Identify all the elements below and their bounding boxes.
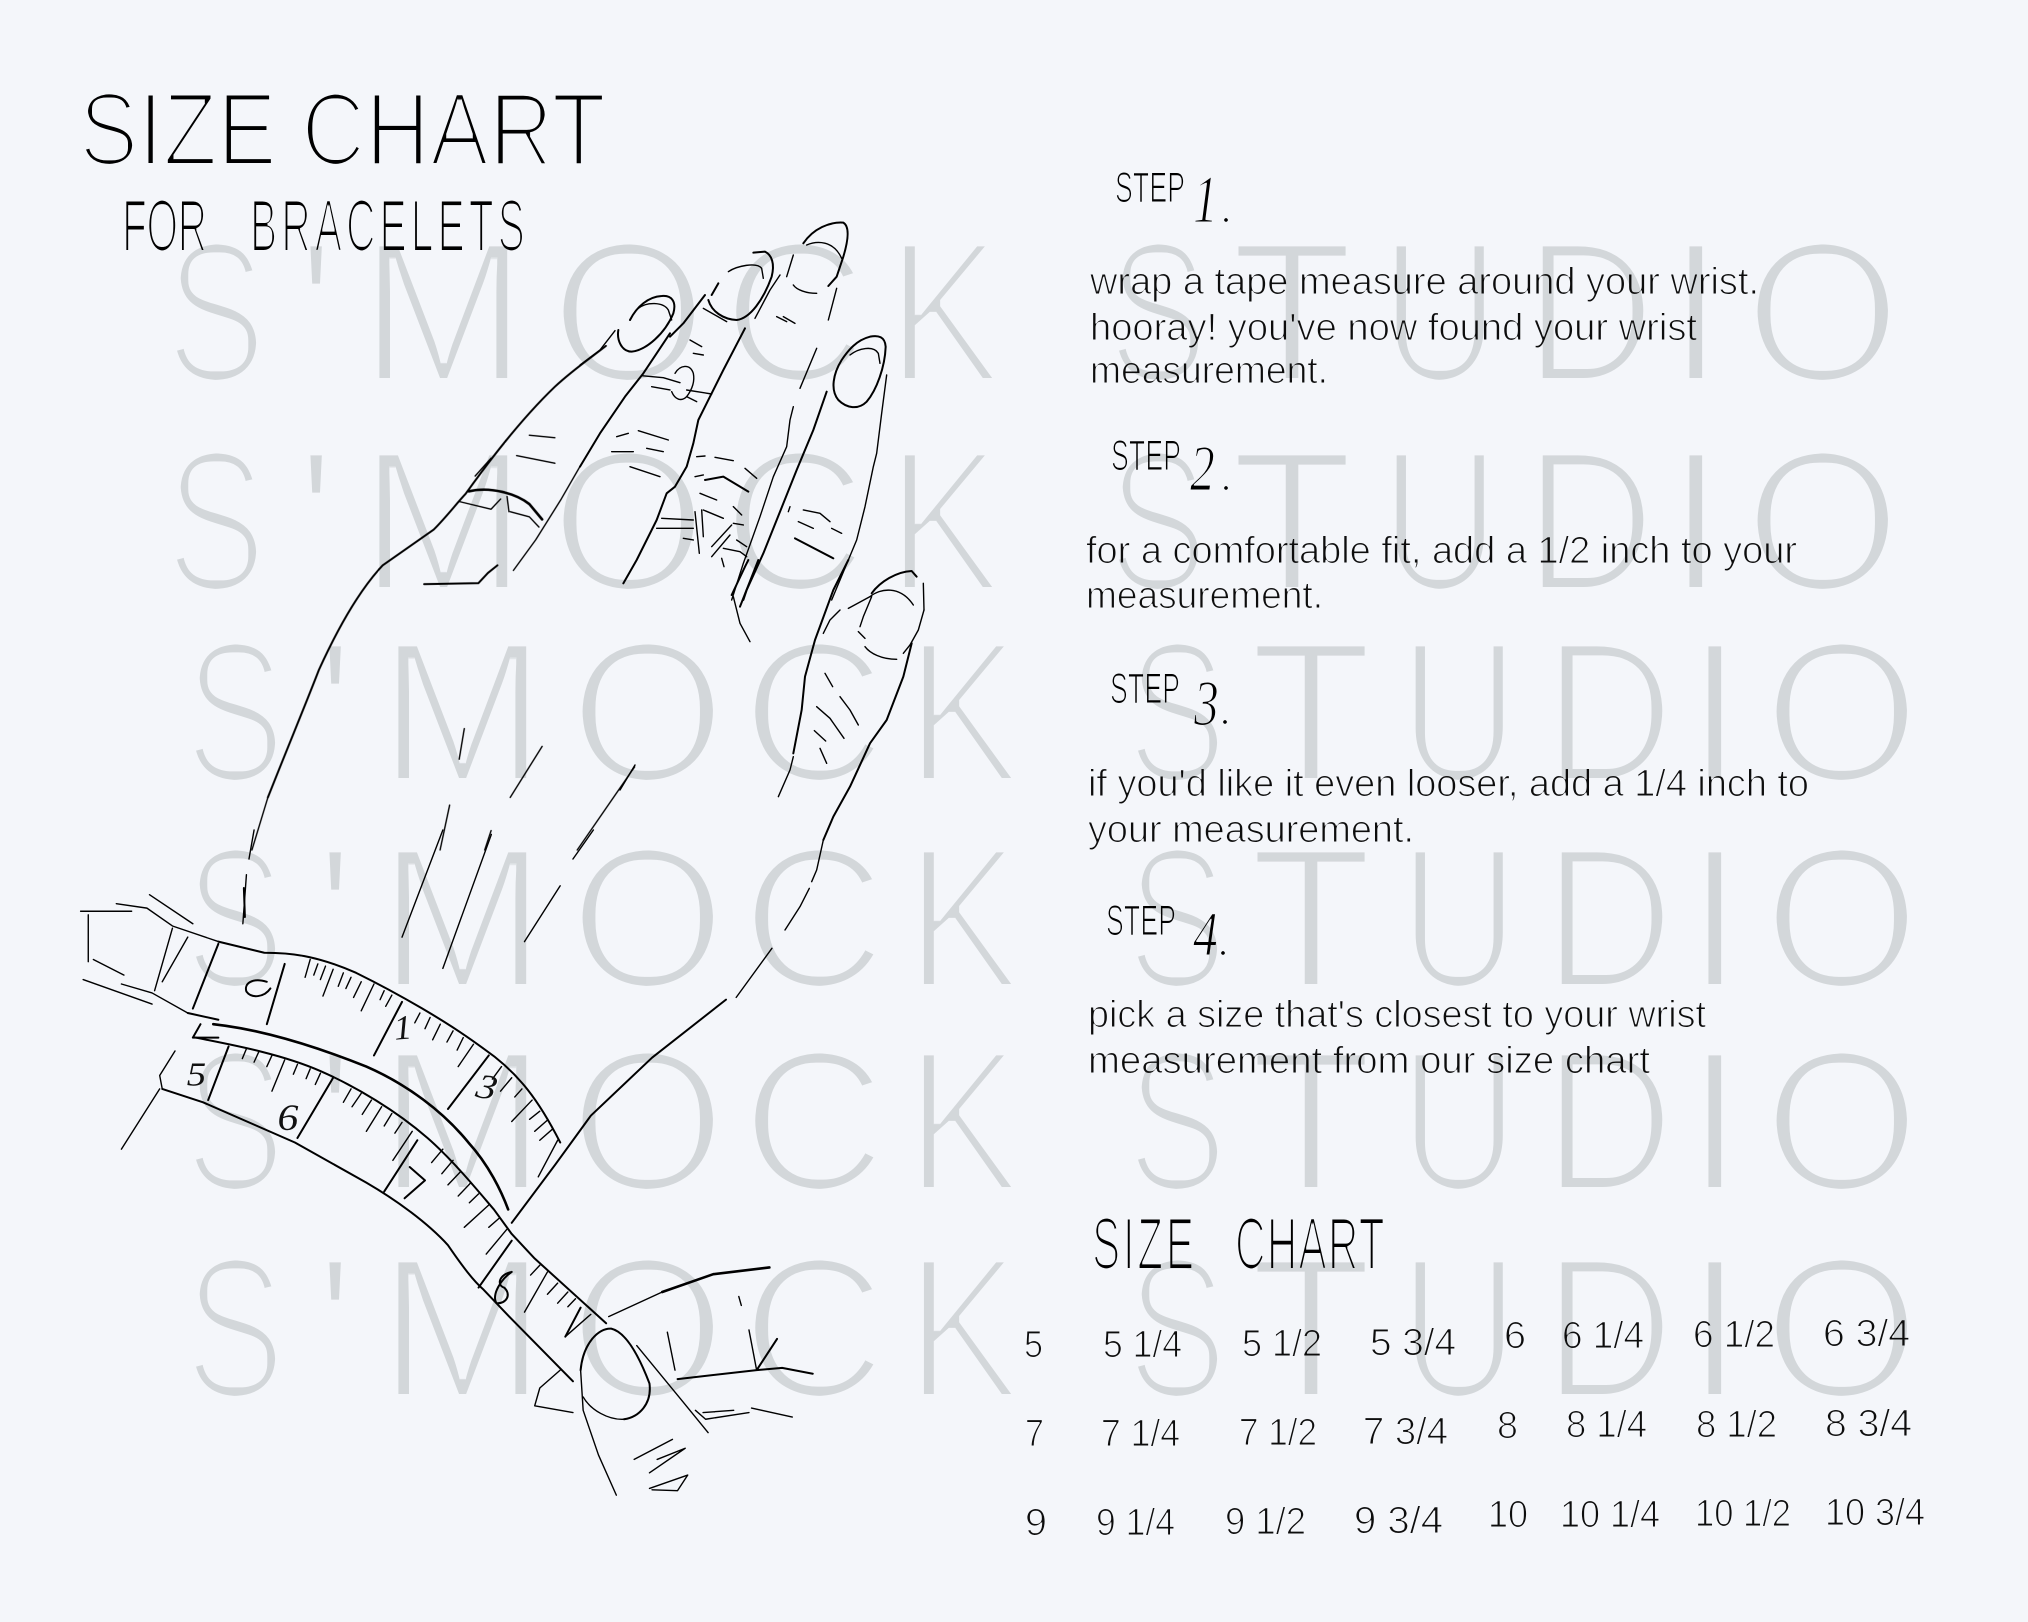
row: sizes 7 to 8 3/4: 8 1/4 bbox=[1566, 1404, 1647, 1446]
row: sizes 7 to 8 3/4: 8 1/2 bbox=[1696, 1404, 1777, 1446]
step 1 text bbox=[1089, 261, 1759, 392]
row: sizes 7 to 8 3/4: 7 bbox=[1025, 1413, 1044, 1455]
row: sizes 9 to 10 3/4: 9 1/4 bbox=[1096, 1502, 1175, 1544]
watermark: repeated S'MOCK STUDIO rows: S bbox=[1127, 1217, 1227, 1440]
watermark: repeated S'MOCK STUDIO rows: S bbox=[185, 1010, 285, 1233]
step 4 text: pick a size that's closest to your wrist bbox=[1088, 994, 1706, 1036]
watermark: repeated S'MOCK STUDIO rows: D bbox=[1525, 410, 1655, 633]
step 1 text: wrap a tape measure around your wrist. bbox=[1089, 261, 1759, 303]
tape numerals: 1 bbox=[392, 1008, 413, 1048]
watermark: repeated S'MOCK STUDIO rows: D bbox=[1544, 1010, 1674, 1233]
watermark: repeated S'MOCK STUDIO rows: K bbox=[907, 807, 1020, 1030]
watermark: repeated S'MOCK STUDIO rows: 'MOC bbox=[316, 807, 886, 1030]
watermark: repeated S'MOCK STUDIO rows: S bbox=[185, 601, 285, 824]
row: sizes 5 to 6 3/4 bbox=[1024, 1313, 1910, 1366]
watermark: repeated S'MOCK STUDIO rows: U bbox=[1400, 599, 1518, 824]
subheading: BRACELETS bbox=[250, 184, 525, 267]
step 3 text: your measurement. bbox=[1088, 809, 1414, 851]
watermark: repeated S'MOCK STUDIO rows: 'MOC bbox=[297, 201, 867, 424]
watermark: repeated S'MOCK STUDIO rows: IO bbox=[1687, 601, 1920, 824]
watermark: repeated S'MOCK STUDIO rows: T bbox=[1250, 1010, 1372, 1233]
size chart heading bbox=[1092, 1203, 1385, 1285]
row: sizes 5 to 6 3/4: 5 3/4 bbox=[1370, 1322, 1456, 1364]
step 3 bbox=[1088, 665, 1809, 851]
back of hand and pinky base bbox=[252, 346, 635, 850]
step 1 heading: STEP bbox=[1115, 164, 1185, 212]
step 1 text: hooray! you've now found your wrist bbox=[1090, 307, 1697, 349]
step 3 heading: 3 bbox=[1193, 667, 1219, 740]
row: sizes 7 to 8 3/4: 8 3/4 bbox=[1825, 1403, 1912, 1445]
watermark: repeated S'MOCK STUDIO rows: T bbox=[1250, 807, 1372, 1030]
watermark: repeated S'MOCK STUDIO rows bbox=[166, 199, 1920, 1440]
tape numerals bbox=[187, 980, 512, 1303]
watermark: repeated S'MOCK STUDIO rows: D bbox=[1544, 807, 1674, 1030]
watermark: repeated S'MOCK STUDIO rows: IO bbox=[1668, 201, 1901, 424]
subheading: FOR bbox=[122, 184, 207, 267]
row: sizes 9 to 10 3/4: 10 1/4 bbox=[1560, 1494, 1660, 1536]
watermark: repeated S'MOCK STUDIO rows: IO bbox=[1687, 1010, 1920, 1233]
row: sizes 9 to 10 3/4 bbox=[1025, 1492, 1925, 1544]
row: sizes 5 to 6 3/4: 6 1/4 bbox=[1562, 1315, 1644, 1357]
watermark: repeated S'MOCK STUDIO rows: U bbox=[1400, 1215, 1518, 1440]
title bbox=[79, 72, 606, 267]
watermark: repeated S'MOCK STUDIO rows: D bbox=[1525, 201, 1655, 424]
watermark: repeated S'MOCK STUDIO rows: S bbox=[1108, 410, 1208, 633]
tape numerals: 5 bbox=[187, 1056, 206, 1093]
watermark: repeated S'MOCK STUDIO rows: U bbox=[1400, 805, 1518, 1030]
step 4 heading: STEP bbox=[1106, 897, 1176, 945]
step 4 heading bbox=[1106, 897, 1226, 969]
watermark: repeated S'MOCK STUDIO rows: S bbox=[1127, 601, 1227, 824]
watermark: repeated S'MOCK STUDIO rows: 'MOC bbox=[316, 601, 886, 824]
watermark: repeated S'MOCK STUDIO rows: K bbox=[888, 201, 1001, 424]
illustration: hand with measuring tape bbox=[81, 223, 924, 1495]
row: sizes 7 to 8 3/4: 7 3/4 bbox=[1363, 1411, 1448, 1453]
step 2 bbox=[1086, 432, 1797, 617]
watermark: repeated S'MOCK STUDIO rows: S bbox=[185, 807, 285, 1030]
pinching fingers bbox=[535, 1267, 813, 1495]
row: sizes 5 to 6 3/4: 5 1/2 bbox=[1242, 1323, 1322, 1365]
step 1 bbox=[1089, 161, 1759, 392]
watermark: repeated S'MOCK STUDIO rows: T bbox=[1250, 1217, 1372, 1440]
row: sizes 9 to 10 3/4: 10 bbox=[1488, 1494, 1528, 1536]
row: sizes 7 to 8 3/4: 7 1/2 bbox=[1239, 1412, 1317, 1454]
row: sizes 5 to 6 3/4: 6 1/2 bbox=[1693, 1314, 1775, 1356]
step 4 heading: 4 bbox=[1193, 901, 1218, 969]
watermark: repeated S'MOCK STUDIO rows: S bbox=[1127, 1010, 1227, 1233]
tape numerals: 6 bbox=[278, 1097, 299, 1138]
row: sizes 9 to 10 3/4: 10 1/2 bbox=[1695, 1493, 1791, 1535]
watermark: repeated S'MOCK STUDIO rows: IO bbox=[1668, 410, 1901, 633]
watermark: repeated S'MOCK STUDIO rows: U bbox=[1381, 408, 1499, 633]
size chart heading: CHART bbox=[1235, 1203, 1385, 1285]
watermark: repeated S'MOCK STUDIO rows: T bbox=[1231, 201, 1353, 424]
step 4 bbox=[1088, 897, 1706, 1082]
watermark: repeated S'MOCK STUDIO rows: S bbox=[185, 1217, 285, 1440]
watermark: repeated S'MOCK STUDIO rows: 'MOC bbox=[316, 1010, 886, 1233]
fingers and nails bbox=[580, 223, 887, 600]
step 2 text: for a comfortable fit, add a 1/2 inch to your bbox=[1086, 530, 1797, 572]
step 2 heading: 2 bbox=[1190, 432, 1215, 505]
thumb bbox=[620, 560, 924, 930]
wrist and tape measure bbox=[81, 830, 813, 1495]
row: sizes 5 to 6 3/4: 6 3/4 bbox=[1823, 1313, 1910, 1355]
tape lower band bbox=[121, 1024, 606, 1381]
watermark: repeated S'MOCK STUDIO rows: D bbox=[1544, 601, 1674, 824]
step 4 text: measurement from our size chart bbox=[1088, 1040, 1650, 1082]
step 2 text bbox=[1086, 530, 1797, 617]
watermark: repeated S'MOCK STUDIO rows: K bbox=[888, 410, 1001, 633]
row: sizes 9 to 10 3/4: 9 bbox=[1025, 1502, 1047, 1544]
row: sizes 5 to 6 3/4: 5 bbox=[1024, 1324, 1043, 1366]
watermark: repeated S'MOCK STUDIO rows: S bbox=[1108, 201, 1208, 424]
step 1 heading: 1 bbox=[1193, 161, 1218, 237]
row: sizes 9 to 10 3/4: 10 3/4 bbox=[1825, 1492, 1925, 1534]
row: sizes 7 to 8 3/4: 8 bbox=[1497, 1405, 1518, 1447]
main heading: SIZE CHART bbox=[79, 72, 606, 188]
row: sizes 9 to 10 3/4: 9 1/2 bbox=[1225, 1501, 1306, 1543]
row: sizes 5 to 6 3/4: 5 1/4 bbox=[1103, 1324, 1182, 1366]
watermark: repeated S'MOCK STUDIO rows: IO bbox=[1687, 807, 1920, 1030]
watermark: repeated S'MOCK STUDIO rows: T bbox=[1231, 410, 1353, 633]
step 2 heading bbox=[1111, 432, 1228, 505]
tape numerals: 3 bbox=[471, 1067, 501, 1108]
watermark: repeated S'MOCK STUDIO rows: S bbox=[166, 410, 266, 633]
row: sizes 5 to 6 3/4: 6 bbox=[1504, 1315, 1526, 1357]
watermark: repeated S'MOCK STUDIO rows: T bbox=[1250, 601, 1372, 824]
row: sizes 7 to 8 3/4: 7 1/4 bbox=[1101, 1413, 1180, 1455]
watermark: repeated S'MOCK STUDIO rows: IO bbox=[1687, 1217, 1920, 1440]
watermark: repeated S'MOCK STUDIO rows: S bbox=[166, 201, 266, 424]
step 3 heading: STEP bbox=[1110, 665, 1180, 713]
watermark: repeated S'MOCK STUDIO rows: U bbox=[1400, 1008, 1518, 1233]
step 4 text bbox=[1088, 994, 1706, 1082]
size table bbox=[1024, 1313, 1925, 1544]
step 3 text bbox=[1088, 763, 1809, 851]
watermark: repeated S'MOCK STUDIO rows: D bbox=[1544, 1217, 1674, 1440]
watermark: repeated S'MOCK STUDIO rows: K bbox=[907, 601, 1020, 824]
step 1 heading bbox=[1115, 161, 1228, 237]
row: sizes 9 to 10 3/4: 9 3/4 bbox=[1354, 1500, 1443, 1542]
subheading bbox=[122, 184, 525, 267]
watermark: repeated S'MOCK STUDIO rows: S bbox=[1127, 807, 1227, 1030]
watermark: repeated S'MOCK STUDIO rows: U bbox=[1381, 199, 1499, 424]
step 3 text: if you'd like it even looser, add a 1/4 inch to bbox=[1088, 763, 1809, 805]
row: sizes 7 to 8 3/4 bbox=[1025, 1403, 1912, 1455]
watermark: repeated S'MOCK STUDIO rows: K bbox=[907, 1217, 1020, 1440]
watermark: repeated S'MOCK STUDIO rows: K bbox=[907, 1010, 1020, 1233]
step 3 heading bbox=[1110, 665, 1228, 740]
tape upper band bbox=[81, 895, 560, 1209]
step 2 heading: STEP bbox=[1111, 432, 1181, 480]
step 1 text: measurement. bbox=[1090, 350, 1328, 392]
size chart heading: SIZE bbox=[1092, 1203, 1194, 1285]
step 2 text: measurement. bbox=[1086, 575, 1323, 617]
watermark: repeated S'MOCK STUDIO rows: 'MOC bbox=[297, 410, 867, 633]
watermark: repeated S'MOCK STUDIO rows: 'MOC bbox=[316, 1217, 886, 1440]
